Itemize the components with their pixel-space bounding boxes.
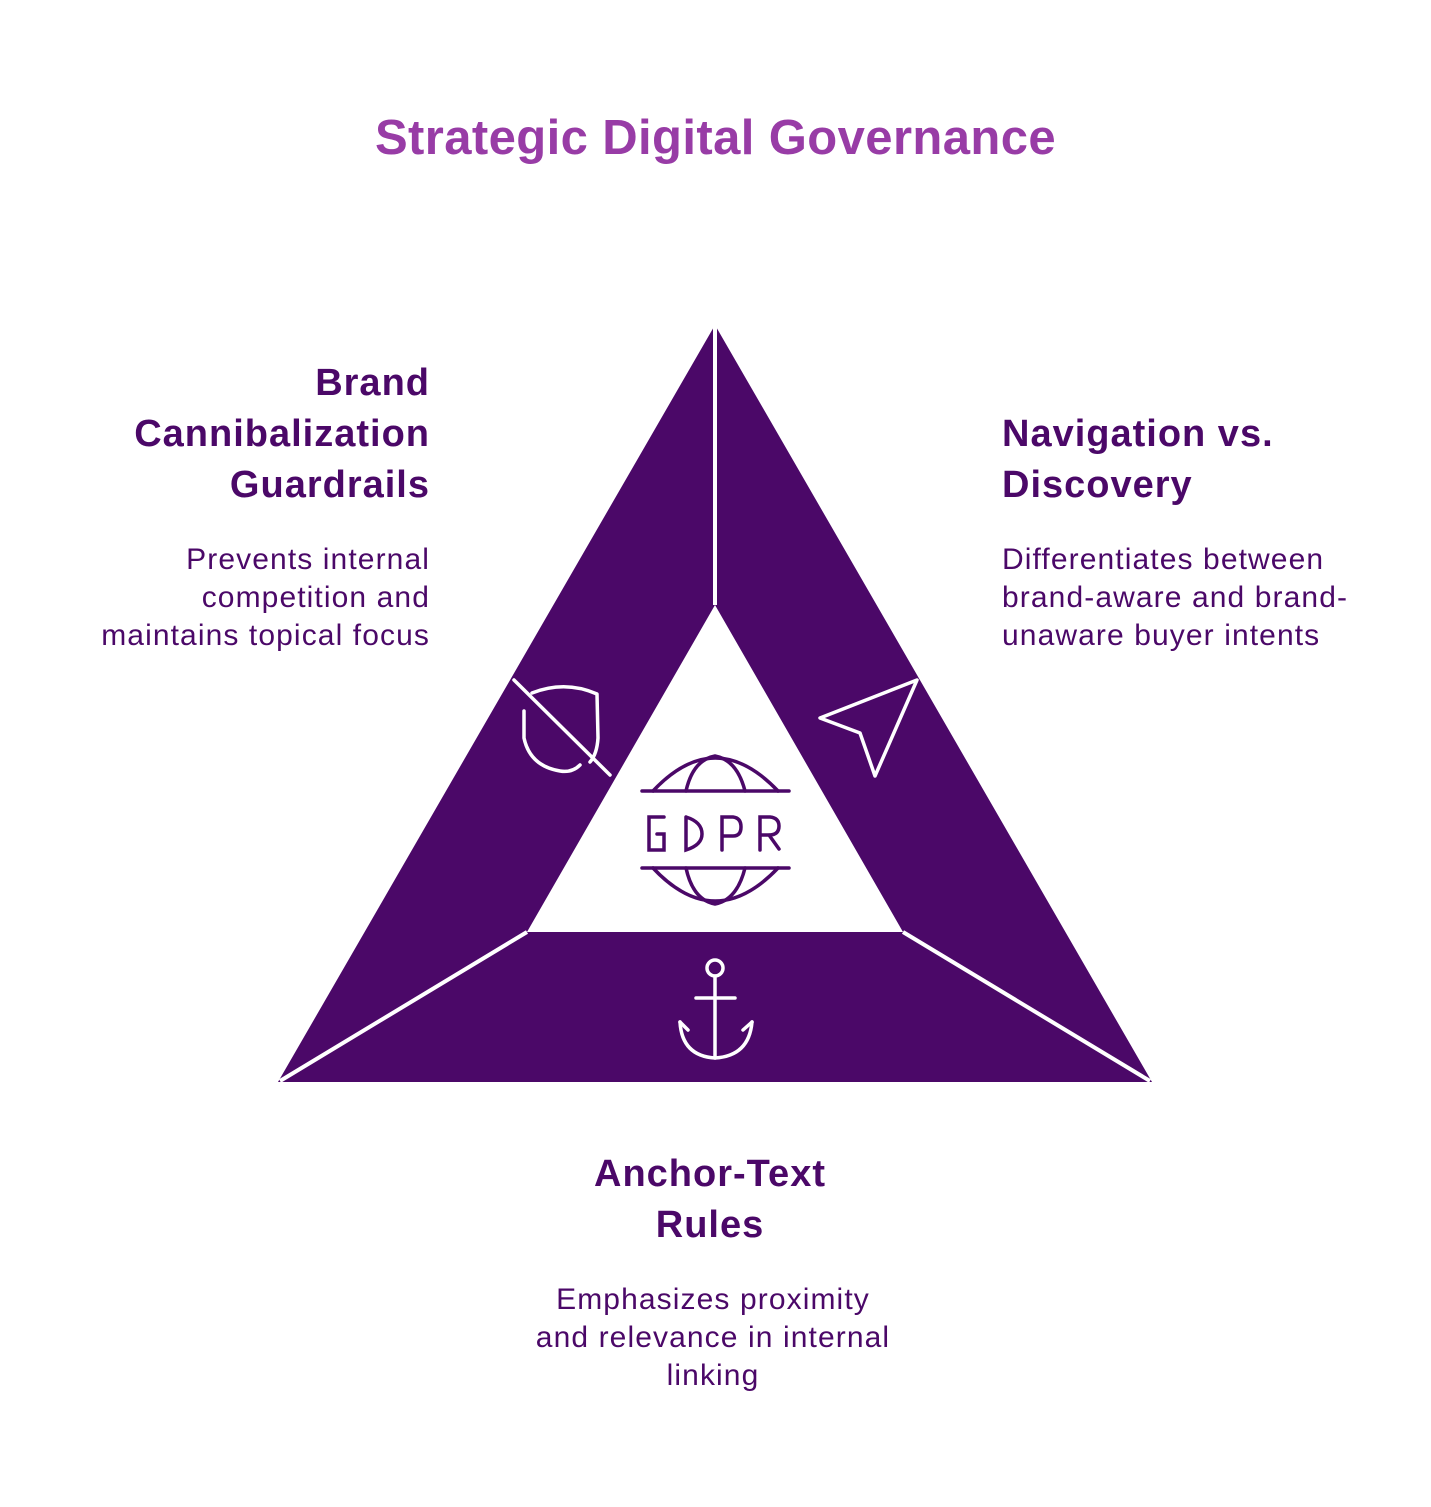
text: anchor-text: [536, 1283, 890, 1392]
text: brand cannibalization: competition and: [202, 581, 430, 614]
heading: anchor-text: Anchor-Text: [594, 1153, 826, 1195]
heading: anchor-text: [594, 1153, 826, 1246]
heading: brand cannibalization: Brand: [315, 362, 430, 404]
text: brand cannibalization: maintains topical focus: [101, 619, 430, 652]
text: navigation: Differentiates between: [1002, 543, 1324, 576]
text: navigation: brand-aware and brand-: [1002, 581, 1348, 614]
icon: shield off: [514, 680, 610, 775]
icon: GDPR globe: [642, 756, 789, 904]
text: anchor-text: linking: [667, 1359, 759, 1392]
heading: navigation: Navigation vs.: [1002, 413, 1274, 455]
text: anchor-text: Emphasizes proximity: [556, 1283, 870, 1316]
heading: navigation: Discovery: [1002, 464, 1193, 506]
text: navigation: unaware buyer intents: [1002, 619, 1320, 652]
heading: brand cannibalization: [134, 362, 430, 506]
heading: anchor-text: Rules: [656, 1204, 764, 1246]
panel: brand cannibalization: [101, 362, 430, 652]
title: Strategic Digital Governance: [375, 111, 1056, 165]
heading: brand cannibalization: Cannibalization: [134, 413, 430, 455]
panel: anchor-text rules: [536, 1153, 890, 1392]
heading: navigation: [1002, 413, 1274, 506]
text: navigation: [1002, 543, 1348, 652]
heading: brand cannibalization: Guardrails: [230, 464, 430, 506]
panel: navigation vs discovery: [1002, 413, 1348, 652]
text: anchor-text: and relevance in internal: [536, 1321, 890, 1354]
text: brand cannibalization: [101, 543, 430, 652]
text: brand cannibalization: Prevents internal: [186, 543, 430, 576]
icon: navigation arrow: [820, 680, 917, 776]
icon: anchor: [680, 960, 752, 1058]
